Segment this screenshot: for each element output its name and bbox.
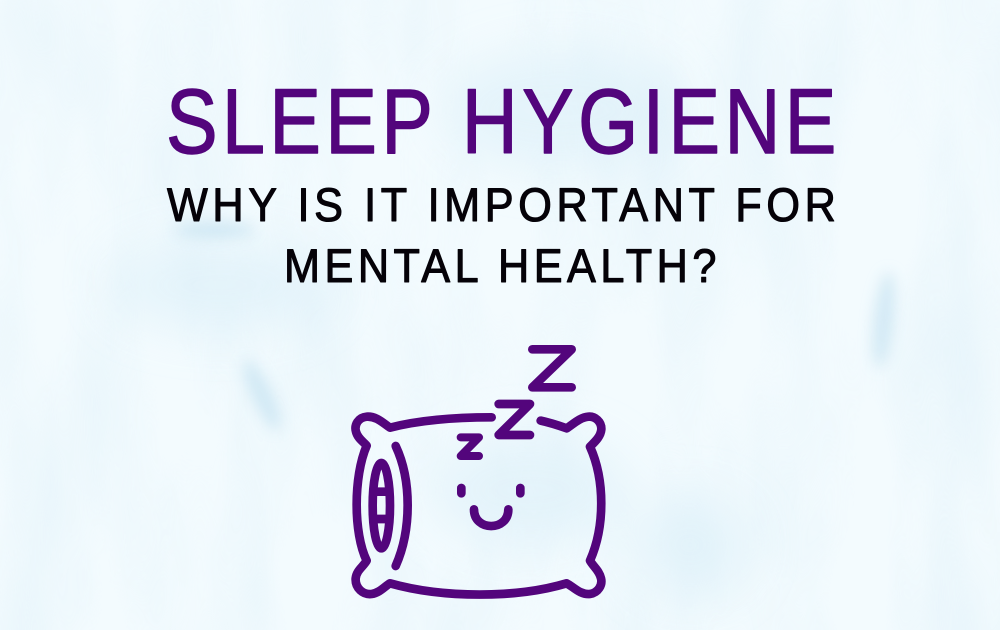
- left eye: [448, 488, 474, 493]
- icon: smiling pillow with Z letters: [356, 349, 601, 595]
- right eye: [507, 488, 533, 493]
- subtitle line 1: WHY IS IT IMPORTANT FOR: [167, 178, 836, 231]
- subtitle line 2: MENTAL HEALTH?: [284, 239, 716, 292]
- large Z: [532, 349, 572, 387]
- title: SLEEP HYGIENE: [166, 71, 836, 174]
- pillow outline: [356, 417, 601, 595]
- pillow side panel: [373, 463, 390, 548]
- pillow side crease: [396, 446, 408, 566]
- smile: [474, 509, 508, 526]
- small Z: [461, 437, 479, 456]
- medium Z: [499, 404, 530, 435]
